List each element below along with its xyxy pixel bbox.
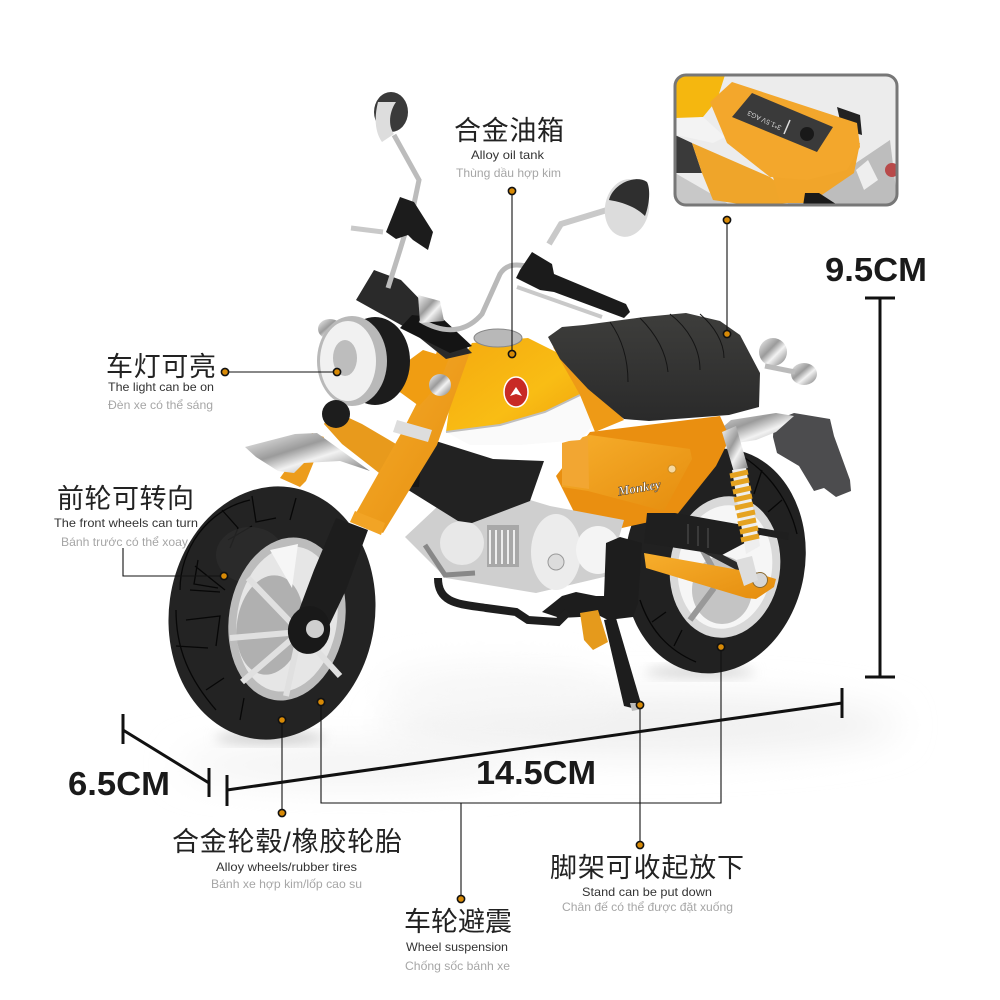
label: wheel suspension: Wheel suspension [406,940,508,954]
callout lines and dots [123,187,731,903]
rear chrome fender [696,413,794,451]
side panel: Monkey [616,476,662,499]
label: headlight: The light can be on [108,380,214,394]
label: wheel suspension: 车轮避震 [404,907,512,937]
orange frame [556,416,730,536]
inset panel: battery cover [674,74,899,206]
dimension: height 9.5CM: 9.5CM [825,251,927,288]
label: alloy wheels and rubber tires: Bánh xe hợp kim/lốp cao su [211,877,362,891]
exhaust pipe [438,578,568,622]
label: front wheel steering [54,484,198,549]
front fender [245,433,370,473]
footrest and stand mount [542,537,642,620]
front support strut [280,433,324,487]
kickstand [580,610,642,711]
chrome bolt [429,374,451,396]
label: front wheel steering: The front wheels can turn [54,516,198,530]
label: alloy oil tank: Thùng dầu hợp kim [456,166,561,180]
label: kickstand [550,853,744,914]
engine [405,500,624,593]
label: kickstand: 脚架可收起放下 [550,853,744,883]
black side box [405,437,544,523]
dimension: length 14.5CM [227,688,842,806]
rear wheel [607,434,823,688]
right handlebar and mirror [418,176,654,330]
headlight [317,316,410,428]
label: front wheel steering: 前轮可转向 [57,484,194,514]
front bracket [324,410,396,480]
rear shock [722,426,760,586]
side panel [562,435,692,511]
motorcycle [152,92,851,753]
label: alloy wheels and rubber tires [172,827,402,891]
dimension: length 14.5CM: 14.5CM [476,754,596,791]
rear mudguard [773,413,851,497]
label: wheel suspension [404,907,512,973]
label: headlight: 车灯可亮 [106,352,216,382]
fuel tank [446,329,595,445]
orange band behind seat [553,347,624,432]
swingarm [644,553,776,599]
label: alloy oil tank: 合金油箱 [454,116,564,146]
front wheel [152,473,392,753]
label: headlight: Đèn xe có thể sáng [108,398,213,412]
label: alloy wheels and rubber tires: 合金轮毂/橡胶轮胎 [172,827,402,857]
label: wheel suspension: Chống sốc bánh xe [405,959,510,973]
left handlebar and mirror [351,92,433,288]
label: kickstand: Stand can be put down [582,885,712,899]
label: headlight [106,352,216,412]
front fork lower [284,518,368,657]
upper fork bracket [393,350,449,406]
label: kickstand: Chân đế có thể được đặt xuống [562,900,733,914]
label: alloy oil tank: Alloy oil tank [471,148,545,162]
label: alloy oil tank [454,116,564,180]
orange front fork [352,343,470,533]
dimension: width 6.5CM: 6.5CM [68,765,170,802]
seat [548,313,760,421]
axle bolt [752,572,768,588]
dimension: height 9.5CM [825,251,927,677]
label: alloy wheels and rubber tires: Alloy wheels/rubber tires [216,860,357,874]
instrument pod [356,270,472,359]
dimension: width 6.5CM [68,714,209,802]
inset panel: battery cover: 3*1.5V AG3 [747,109,783,131]
label: front wheel steering: Bánh trước có thể xoay [61,535,188,549]
rear signal [759,338,817,385]
swingarm cover [644,513,789,555]
floor shadow [180,667,900,785]
